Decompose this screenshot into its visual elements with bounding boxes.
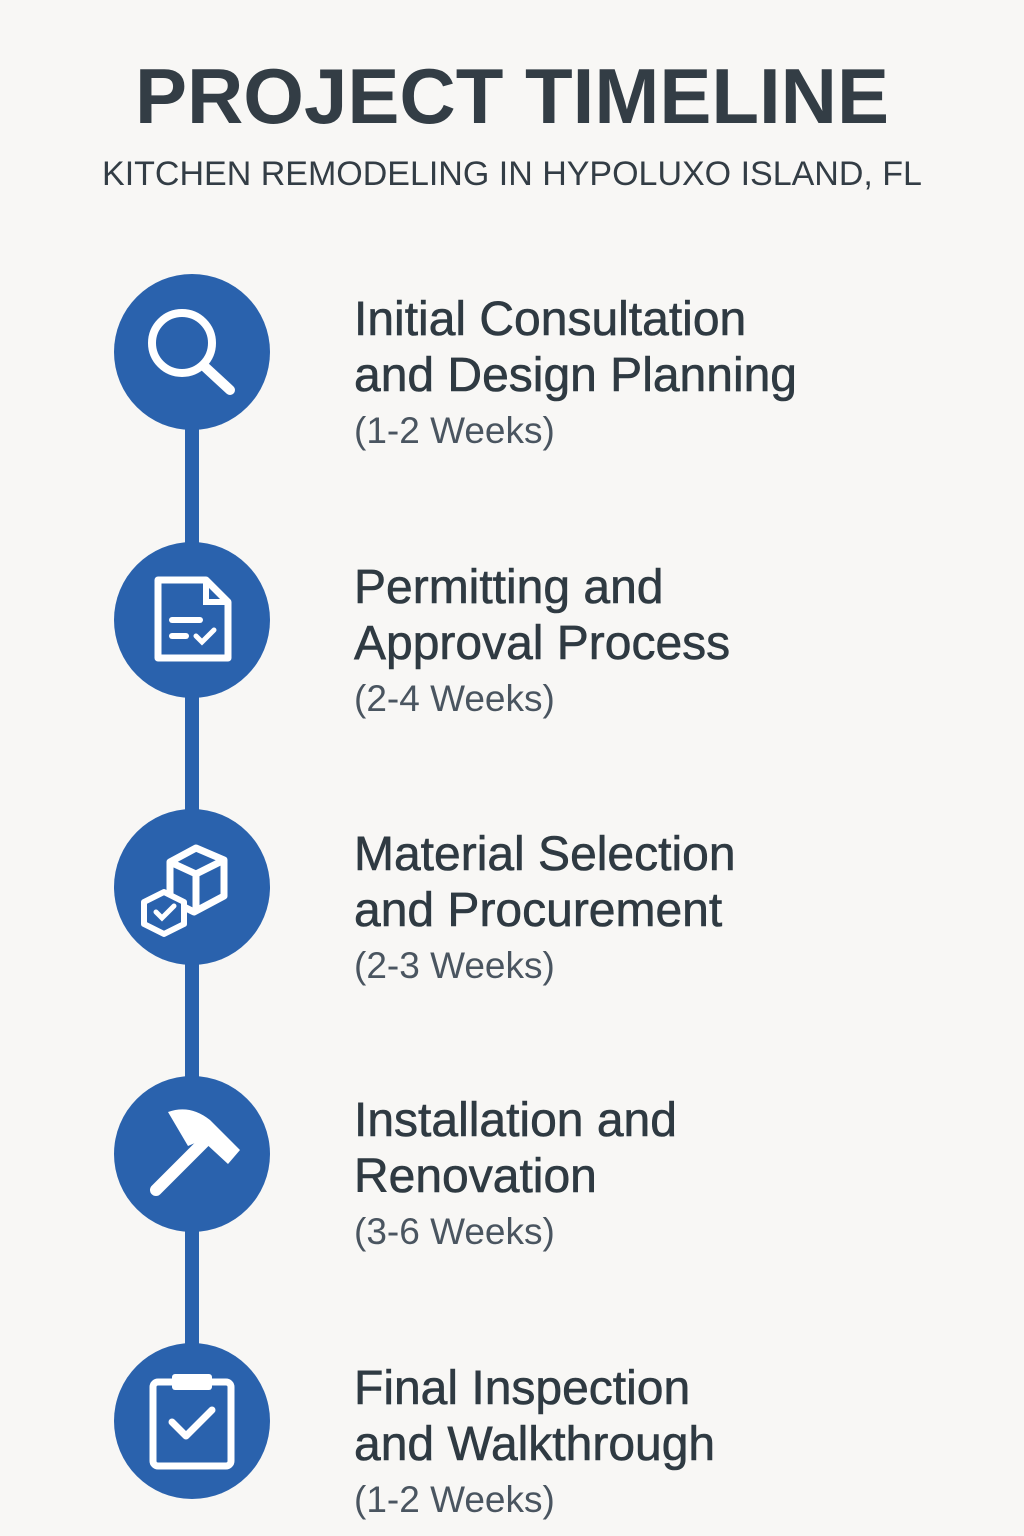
step 4 text — [354, 1094, 677, 1252]
connector line — [185, 352, 199, 1421]
step 1 text: (1-2 Weeks) — [354, 410, 555, 451]
icon: boxes — [114, 809, 270, 965]
subtitle: KITCHEN REMODELING IN HYPOLUXO ISLAND, FL — [102, 155, 922, 193]
step 4 text: (3-6 Weeks) — [354, 1211, 555, 1252]
step 5 text — [354, 1362, 715, 1520]
step 4 text: Renovation — [354, 1150, 597, 1203]
icon: magnifier — [114, 274, 270, 430]
step 3 text: (2-3 Weeks) — [354, 945, 555, 986]
step 5 text: and Walkthrough — [354, 1418, 715, 1471]
step 1 text: and Design Planning — [354, 349, 797, 402]
step 3 text: Material Selection — [354, 828, 736, 881]
step 3 text: and Procurement — [354, 884, 722, 937]
icon: clipboard — [114, 1343, 270, 1499]
step 1 text: Initial Consultation — [354, 293, 746, 346]
step 3 text — [354, 828, 736, 986]
step 1 text — [354, 293, 797, 451]
step 2 text — [354, 561, 730, 719]
step 2 text: Approval Process — [354, 617, 730, 670]
icon: document — [114, 542, 270, 698]
step 4 text: Installation and — [354, 1094, 677, 1147]
title: PROJECT TIMELINE — [135, 52, 889, 140]
icon: hammer — [114, 1076, 270, 1232]
step 5 text: Final Inspection — [354, 1362, 690, 1415]
step 2 text: Permitting and — [354, 561, 664, 614]
step 5 text: (1-2 Weeks) — [354, 1479, 555, 1520]
step 2 text: (2-4 Weeks) — [354, 678, 555, 719]
